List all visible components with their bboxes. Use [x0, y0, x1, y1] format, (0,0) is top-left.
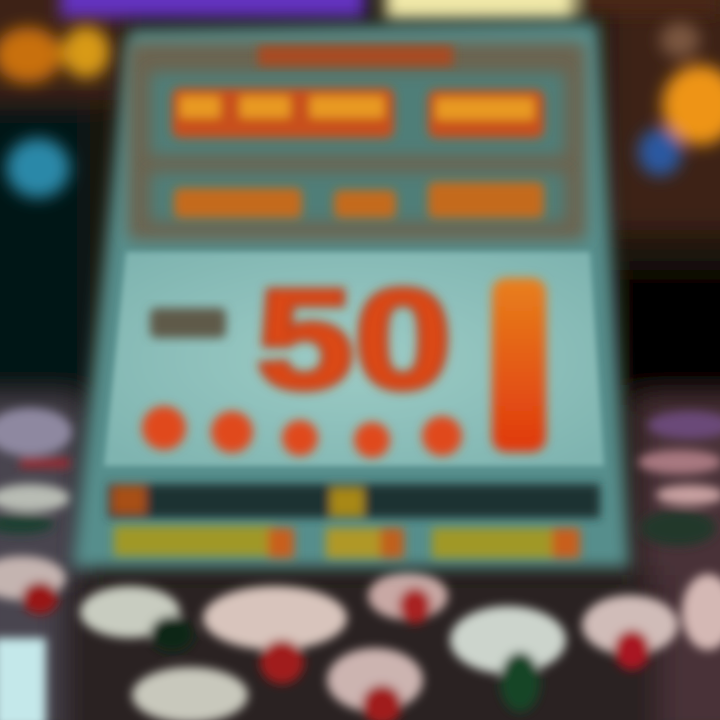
big number: 50 [256, 260, 452, 419]
heading bar [258, 46, 453, 66]
row of dots [142, 406, 462, 458]
heading line 1 [172, 88, 544, 138]
slot machine body [72, 22, 630, 568]
panel: lower buttons [114, 526, 580, 558]
tall bar [492, 278, 546, 452]
background lights [0, 22, 720, 198]
top light strips [60, 0, 720, 20]
panel: lower dark strip [108, 484, 600, 518]
small label [150, 308, 226, 338]
heading line 2 [174, 182, 544, 218]
panel: header sign [128, 42, 586, 240]
panel: display screen [104, 252, 604, 466]
machine frame [72, 22, 630, 568]
poker chips foreground [0, 408, 720, 720]
